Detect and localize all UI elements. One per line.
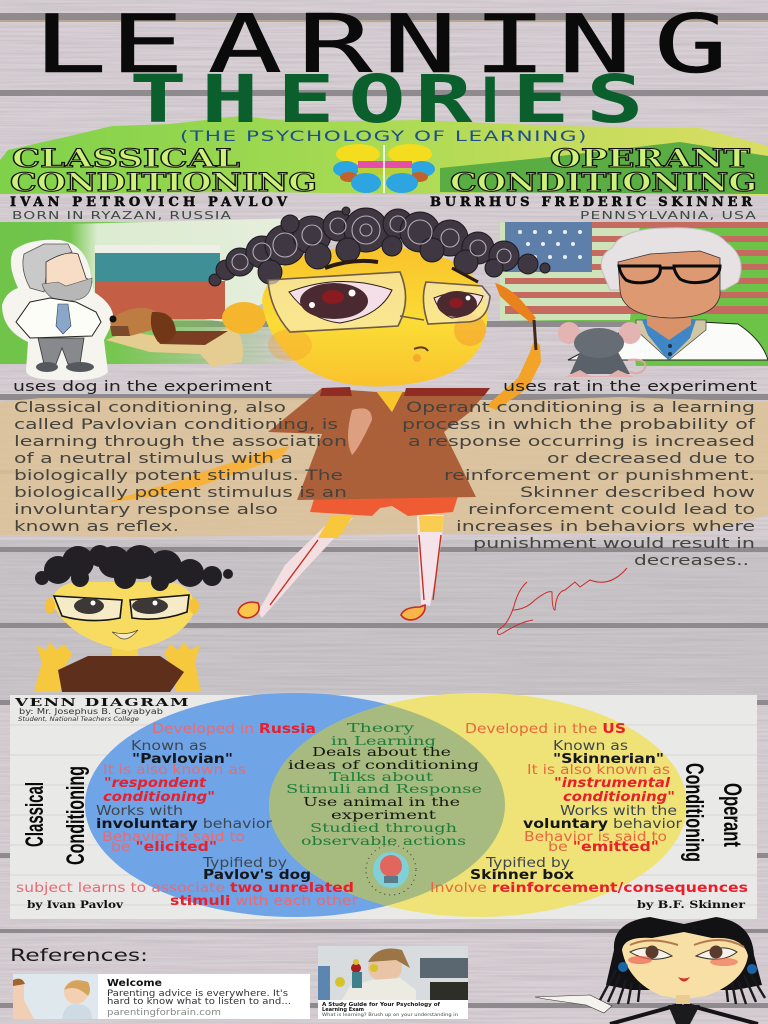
heading: operant conditioning: OPERANT [550,144,751,173]
paragraph: operant conditioning: decreases.. [634,553,749,569]
shared column text: Studied through [310,820,457,835]
classical column text: "respondent [104,776,207,791]
paragraph: classical conditioning: Classical conditioning, also [14,400,286,416]
left arm [104,446,290,503]
operant column text: It is also known as [527,763,670,778]
shared column text: in Learning [331,733,436,748]
shorts [310,496,458,516]
reference card: study guide: Learning Exam [322,1007,364,1013]
classical column text: Behavior is said to [102,830,245,845]
reference card: parenting: hard to know what to listen to and... [107,997,291,1007]
circle: classical [85,693,505,917]
head [262,246,487,386]
subtitle: (THE PSYCHOLOGY OF LEARNING) [180,129,588,145]
illustration: main cartoon character [104,207,550,620]
neck [647,305,691,340]
eyebrows [325,261,378,268]
eyes [289,281,392,323]
paragraph: operant conditioning [402,400,756,569]
hair [601,228,741,290]
paragraph: operant conditioning: Skinner described how [520,485,755,501]
birthplace: Russia: BORN IN RYAZAN, RUSSIA [12,209,232,222]
paragraph: operant conditioning: punishment would result in [473,536,755,552]
title: Theories: ES [512,62,644,138]
title: Theories: THEOR [129,62,473,138]
shared column text: Use animal in the [303,794,460,809]
paragraph: classical conditioning: involuntary response also [14,502,278,518]
heading: classical conditioning: CLASSICAL [12,144,241,173]
green paint swash behind headers [0,116,768,366]
reference card: parenting: parentingforbrain.com [107,1008,221,1018]
heading: classical conditioning [10,144,317,197]
paragraph: operant conditioning: process in which the probability of [402,417,756,433]
reference card: parenting [13,974,310,1019]
name: Ivan Petrovich Pavlov: IVAN PETROVICH PAVLOV [10,195,288,210]
overlap [269,704,505,906]
paragraph: classical conditioning [14,400,347,535]
paragraph: classical conditioning: biologically potent stimulus is an [14,485,347,501]
flag: Russia [95,245,225,319]
flag: USA [505,222,768,314]
operant column text: Skinner box [470,868,575,883]
dress [268,388,490,500]
classical column text: Pavlov's dog [203,868,311,883]
reference card: study guide: What is learning? Brush up on your understanding in [322,1012,459,1017]
heading: operant conditioning: CONDITIONING [450,168,757,197]
classical column text: conditioning" [103,790,215,805]
operant column text: conditioning" [563,790,675,805]
label: rat experiment: uses rat in the experiment [503,379,757,395]
hair [209,207,550,286]
classical column text: "Pavlovian" [132,752,233,767]
panel: venn diagram [10,693,757,919]
operant column text: "instrumental [554,776,671,791]
paragraph: operant conditioning: reinforcement or punishment. [444,468,755,484]
paragraph: operant conditioning: increases in behaviors where [456,519,755,535]
name: Burrhus Frederic Skinner: BURRHUS FREDERIC SKINNER [430,195,752,210]
paragraph: classical conditioning: learning through the association [14,434,347,450]
face [618,251,720,318]
classical column text: subject learns to associate two unrelated [16,881,354,896]
reference card: parenting: Parenting advice is everywhere. It's [107,989,288,999]
operant column text: voluntary behavior [523,817,683,832]
illustration: dog [106,308,243,367]
reference card: study guide [318,946,468,1019]
venn title: Student, National Teachers College [18,716,139,723]
classical column text: It is also known as [103,763,246,778]
paragraph: operant conditioning: reinforcement could lead to [468,502,755,518]
paragraph: classical conditioning: known as reflex. [14,519,179,535]
operant column text: Behavior is said to [524,830,667,845]
paragraph: classical conditioning: called Pavlovian conditioning, is [14,417,338,433]
vertical heading: operant conditioning: Conditioning [680,763,708,862]
tan paint band behind paragraphs [0,397,768,537]
icon: colourful brain [333,144,435,193]
legs [258,518,353,618]
shared column text [286,720,482,848]
venn title: VENN DIAGRAM [14,695,190,709]
classical column text: be "elicited" [111,840,217,855]
classical column text: Developed in Russia [152,722,316,737]
illustration: boy with curly hair [34,545,233,692]
vertical heading: operant conditioning: Operant [718,783,746,847]
paragraph: operant conditioning: Operant conditioning is a learning [406,400,755,416]
right arm [486,340,541,410]
signature [498,568,627,634]
operant column text [430,722,748,896]
operant column text: Known as [553,739,628,754]
classical column text: Known as [131,739,207,754]
shared column text: Talks about [329,769,433,784]
credit: by Ivan Pavlov: by Ivan Pavlov [27,900,124,911]
label: dog experiment: uses dog in the experiment [13,379,272,395]
illustration: Pavlov [2,240,113,380]
operant column text: "Skinnerian" [553,752,664,767]
vertical heading: classical conditioning [21,766,90,865]
heading: operant conditioning [450,144,757,197]
illustration: Skinner and mouse [558,228,768,377]
shared column text: experiment [331,807,436,822]
glasses [268,272,406,332]
vertical heading: classical conditioning: Conditioning [62,766,90,865]
title: Theories: I [481,62,499,136]
references heading: References: [10,946,148,966]
credit: by B.F. Skinner: by B.F. Skinner [637,900,746,911]
icon: lightbulb with brain [366,845,416,895]
glasses [619,266,720,283]
shared column text: ideas of conditioning [288,757,479,772]
shared column text: Deals about the [312,744,451,759]
heading: classical conditioning: CONDITIONING [10,168,317,197]
lab coat [568,322,768,360]
feet [238,602,259,618]
classical column text: Works with [96,804,183,819]
shared column text: Theory [347,720,415,735]
classical column text: stimuli with each other [170,894,359,909]
classical column text: Typified by [202,856,287,871]
paragraph: classical conditioning: of a neutral stimulus with a [14,451,293,467]
title: Learning: LEARNING [33,0,728,91]
classical column text: involuntary behavior [96,817,273,832]
operant column text: Typified by [485,856,570,871]
paragraph: operant conditioning: a response occurring is increased [408,434,755,450]
venn title [14,695,190,723]
paragraph: classical conditioning: biologically potent stimulus. The [14,468,343,484]
birthplace: USA: PENNSYLVANIA, USA [580,209,757,222]
operant column text: Developed in the US [465,722,626,737]
mouse [558,322,580,344]
operant column text: be "emitted" [548,840,659,855]
reference card: parenting: Welcome [107,978,162,989]
reference card: study guide: A Study Guide for Your Psychology of [322,1002,441,1008]
shared column text: observable actions [301,833,466,848]
paragraph: operant conditioning: or decreased due to [547,451,755,467]
vertical heading: classical conditioning: Classical [21,782,49,847]
circle: operant [269,693,687,917]
venn title: by: Mr. Josephus B. Cayabyab [19,707,163,716]
nose and mouth [414,347,428,351]
ear [222,302,266,334]
operant column text: Involve reinforcement/consequences [430,881,748,896]
illustration: woman with black bob [535,917,765,1024]
shared column text: Stimuli and Response [286,781,482,796]
title: Theories [129,62,644,138]
operant column text: Works with the [560,804,677,819]
vertical heading: operant conditioning [680,763,746,862]
classical column text [16,722,359,909]
